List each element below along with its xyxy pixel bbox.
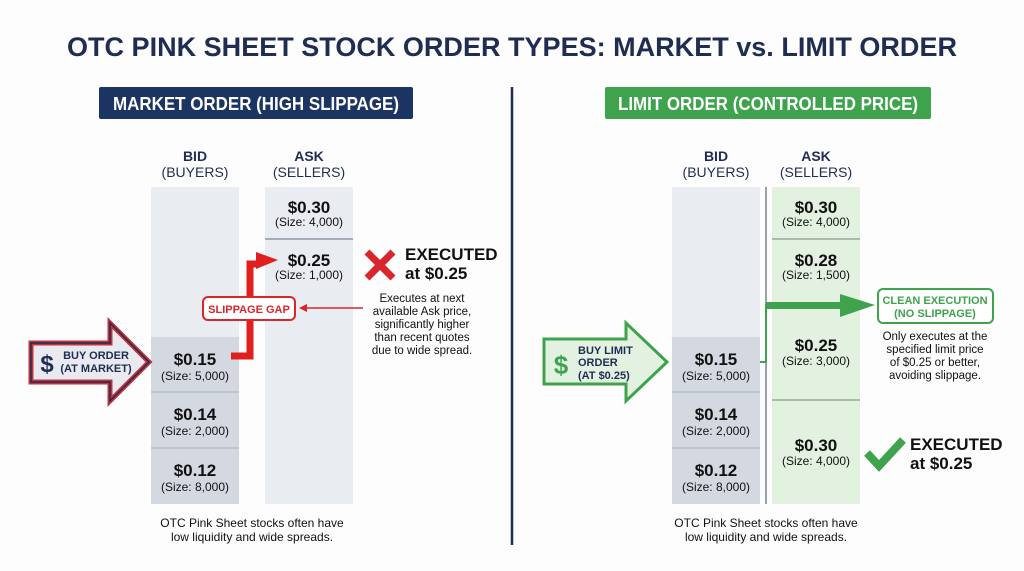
icon: buy limit arrow	[544, 323, 667, 401]
column headers	[683, 148, 852, 180]
footnote: low liquidity and wide spreads.	[685, 530, 847, 544]
executed label: EXECUTED	[910, 435, 1003, 454]
heading: limit order	[605, 87, 931, 119]
icon: buy limit arrow: $	[554, 350, 569, 380]
ask column: (Size: 3,000)	[782, 354, 850, 368]
callout: clean execution: (NO SLIPPAGE)	[894, 308, 976, 320]
icon: buy limit arrow: BUY LIMIT	[578, 345, 633, 357]
ask column: (Size: 4,000)	[275, 215, 343, 229]
explanation text: avoiding slippage.	[889, 370, 981, 382]
ask column: $0.30	[288, 198, 330, 217]
explanation text: Executes at next	[379, 293, 465, 305]
ask column: $0.30	[795, 436, 837, 455]
executed label	[910, 435, 1003, 473]
icon: buy order arrow: (AT MARKET)	[60, 363, 132, 375]
ask column	[265, 187, 353, 504]
ask column	[772, 187, 860, 504]
explanation text: available Ask price,	[373, 306, 471, 318]
column headers: BID	[183, 148, 207, 164]
bid column: $0.15	[695, 350, 737, 369]
column headers: (BUYERS)	[162, 164, 228, 180]
callout: slippage gap	[203, 297, 295, 320]
bid column: $0.15	[174, 350, 216, 369]
column headers	[162, 148, 345, 180]
executed label: at $0.25	[910, 454, 972, 473]
divider	[511, 87, 513, 545]
bid column: $0.12	[174, 461, 216, 480]
explanation text	[372, 293, 472, 357]
icon: buy limit arrow: (AT $0.25)	[578, 370, 630, 382]
callout: clean execution: CLEAN EXECUTION	[882, 295, 988, 307]
ask column: $0.28	[795, 251, 837, 270]
footnote: OTC Pink Sheet stocks often have	[160, 516, 344, 530]
heading: market order: MARKET ORDER (HIGH SLIPPAGE)	[113, 94, 399, 114]
arrow: pointer	[299, 304, 363, 312]
footnote	[160, 516, 344, 544]
executed label: at $0.25	[405, 264, 467, 283]
icon: check mark	[867, 440, 903, 466]
icon: buy order arrow: $	[40, 351, 54, 378]
ask column: (Size: 1,500)	[782, 268, 850, 282]
bid column: (Size: 8,000)	[161, 480, 229, 494]
panel: market order	[31, 87, 498, 544]
explanation text: specified limit price	[886, 344, 984, 356]
ask column: (Size: 1,000)	[275, 268, 343, 282]
ask column: $0.30	[795, 198, 837, 217]
icon: buy order arrow: BUY ORDER	[63, 350, 129, 362]
bid column: $0.14	[695, 405, 738, 424]
column headers: (SELLERS)	[273, 164, 345, 180]
bid column: $0.12	[695, 461, 737, 480]
column headers: ASK	[294, 148, 324, 164]
explanation text: due to wide spread.	[372, 345, 472, 357]
arrow: slippage path	[231, 252, 278, 356]
bid column: (Size: 5,000)	[161, 369, 229, 383]
callout: clean execution	[878, 289, 993, 323]
icon: buy order arrow	[31, 323, 149, 401]
bid column: $0.14	[174, 405, 217, 424]
bid column: (Size: 5,000)	[682, 369, 750, 383]
footnote	[674, 516, 858, 544]
bid column	[151, 187, 239, 504]
heading: market order	[99, 87, 413, 119]
bid column	[672, 187, 760, 504]
icon: buy limit arrow: ORDER	[578, 357, 618, 369]
bid column: (Size: 2,000)	[682, 424, 750, 438]
panel: limit order	[544, 87, 1003, 544]
heading: limit order: LIMIT ORDER (CONTROLLED PRICE)	[618, 94, 918, 114]
explanation text	[883, 331, 987, 382]
footnote: OTC Pink Sheet stocks often have	[674, 516, 858, 530]
footnote: low liquidity and wide spreads.	[171, 530, 333, 544]
explanation text: significantly higher	[375, 319, 469, 331]
bid column: (Size: 8,000)	[682, 480, 750, 494]
bid column: (Size: 2,000)	[161, 424, 229, 438]
explanation text: of $0.25 or better,	[890, 357, 980, 369]
column headers: ASK	[801, 148, 831, 164]
title: OTC PINK SHEET STOCK ORDER TYPES: MARKET vs. LIMIT ORDER	[67, 32, 957, 62]
ask column: (Size: 4,000)	[782, 215, 850, 229]
executed label	[405, 245, 498, 283]
ask column: $0.25	[288, 251, 330, 270]
column headers: (SELLERS)	[780, 164, 852, 180]
icon: red X	[367, 252, 393, 278]
column headers: (BUYERS)	[683, 164, 749, 180]
explanation text: than recent quotes	[374, 332, 470, 344]
ask column: $0.25	[795, 336, 837, 355]
executed label: EXECUTED	[405, 245, 498, 264]
column headers: BID	[704, 148, 728, 164]
ask column: (Size: 4,000)	[782, 454, 850, 468]
callout: slippage gap: SLIPPAGE GAP	[208, 304, 290, 316]
explanation text: Only executes at the	[883, 331, 987, 343]
arrow: clean execution	[760, 294, 875, 362]
